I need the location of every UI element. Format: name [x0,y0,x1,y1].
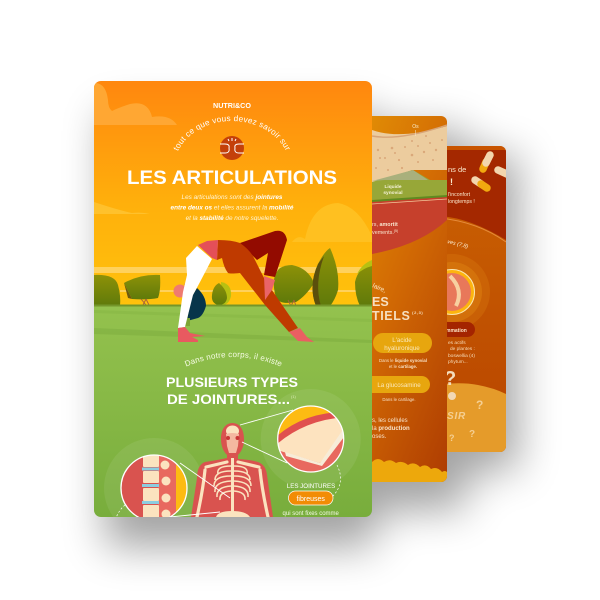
heading: essentiels: ES [372,295,389,309]
arc subtitle: tout ce que vous devez savoir sur [174,115,290,150]
pill: acide hyaluronique: hyaluronique [384,345,420,352]
pill: inflammation: mmation [446,328,467,334]
heading: essentiels [372,297,422,320]
label: les jointures fibreuses [283,483,340,517]
pill: acide hyaluronique [373,333,432,353]
heading: essentiels: (2,3) [410,310,423,315]
trees [94,248,372,306]
intro text: Les articulations sont des jointures [182,194,283,201]
circle: fibrous joint [277,405,345,473]
yellow bottom area [447,383,506,452]
caption: acide: Dans le liquide synovial [379,358,427,363]
bone pores [375,135,443,171]
curved heading: laire, [371,282,387,295]
active ingredients text: de plantes : [450,346,475,352]
arc lead-in: Dans notre corps, il existe [184,352,282,366]
caption: acide: et le cartilage. [389,364,417,369]
knee circle [447,254,490,324]
cloud top left [94,83,177,125]
heading: essentiels: TIELS [372,309,410,323]
synovial fluid [372,170,447,200]
scalloped footer [372,459,447,482]
red band text: vements. [372,230,394,236]
caption: glucosamine: Dans le cartilage. [382,397,416,402]
header text: ns de [448,165,466,174]
heading: plusieurs types: PLUSIEURS TYPES [166,374,298,390]
active ingredients text: boswellia (4) [448,353,475,359]
cells text [372,418,410,440]
question marks: ? [469,429,475,440]
pill: glucosamine: La glucosamine [377,382,421,389]
question marks: SIR [447,411,466,422]
title: LES ARTICULATIONS [127,168,337,189]
pill: glucosamine [372,376,430,393]
figure: yoga pose [174,231,314,342]
red header [447,150,506,240]
header text: ! [450,177,453,187]
label: les jointures fibreuses: fibreuses [296,496,325,503]
skeleton [191,423,273,517]
header text [447,165,475,250]
pill: inflammation [447,322,475,337]
cells text: s, les cellules [372,418,408,424]
label: liquide synovial: Liquide [384,184,402,190]
icon: capsules [475,155,509,188]
label: les jointures fibreuses: qui sont fixes comme [283,511,340,517]
intro text [171,194,294,222]
header text: ves (7,8) [447,239,469,250]
question marks [447,371,483,441]
icon: joint [220,136,244,160]
label: liquide synovial [384,184,402,195]
dashed connectors [116,465,341,518]
footnote: (1) [291,394,297,399]
cells text: la production [372,426,410,432]
circle: spine joint [120,454,188,522]
intro text: entre deux os et elles assurent la mobilité [171,204,294,212]
halos [104,389,361,538]
active ingredients text: phytum... [448,359,468,365]
question marks: ? [449,433,454,443]
header text: longtemps ! [448,199,475,205]
red band text: rs, amortit [372,222,398,228]
header text: l'inconfort [448,192,471,198]
horizon bands [94,267,372,292]
pill: acide hyaluronique: L'acide [392,337,412,344]
hill left [94,202,150,214]
panel: back card [447,146,506,452]
question marks: ? [444,368,456,390]
red band text: (5) [394,229,398,233]
label: Os [412,124,418,136]
skull [226,426,240,453]
connector lines [170,410,293,517]
active ingredients text: es actifs [448,340,466,346]
label: liquide synovial: synovial [383,190,403,196]
grass [94,305,372,517]
cells text: oses. [372,434,387,440]
red band text [372,222,398,234]
heading: plusieurs types [166,378,298,404]
intro text: et la stabilité de notre squelette. [186,215,278,222]
pelvis [216,511,250,517]
red band [372,197,447,254]
shoulders and arms [197,462,268,517]
label: les jointures fibreuses: LES JOINTURES [287,483,335,490]
label: Os: Os [412,124,419,130]
hill right [292,203,372,242]
active ingredients text [448,340,475,365]
drop shadow [105,112,518,547]
logo: NUTRI&CO [213,101,251,110]
heading: plusieurs types: DE JOINTURES... [167,391,290,407]
ribcage [214,458,251,516]
panel: middle card [372,116,447,482]
bone top [372,126,447,182]
panel: front card [94,81,372,517]
question marks: ? [476,398,483,412]
muscle silhouette [191,423,273,517]
caption: acide [379,358,427,369]
